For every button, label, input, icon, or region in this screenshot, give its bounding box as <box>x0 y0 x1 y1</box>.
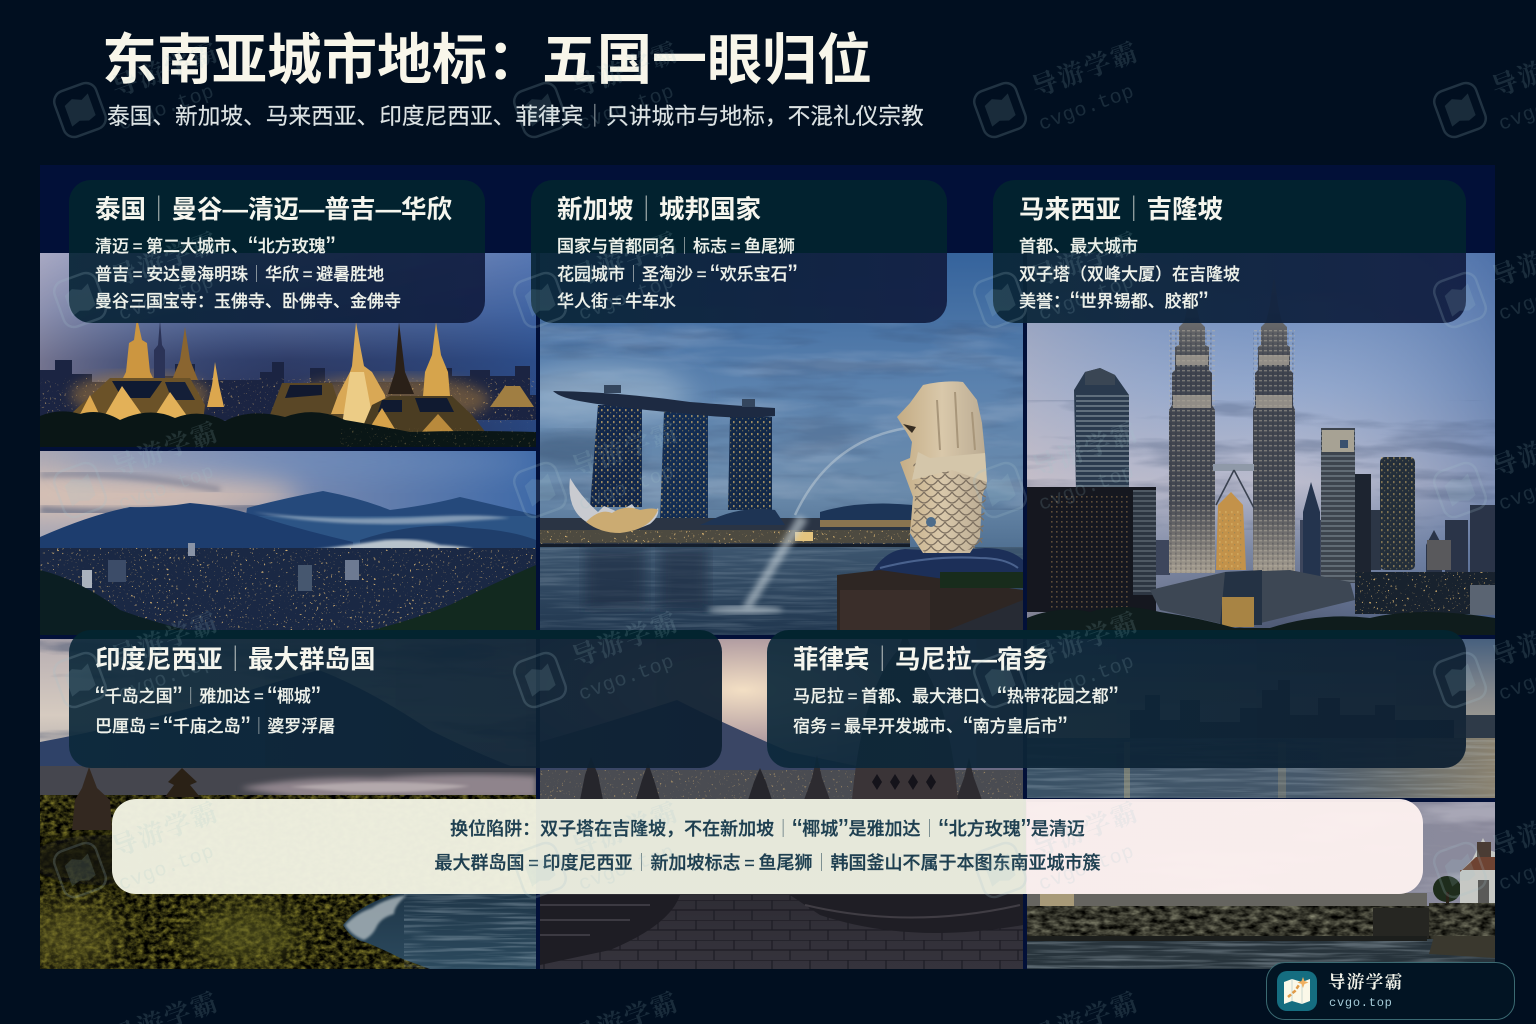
panel: Thailand <box>69 180 485 323</box>
watermark layer: 导游学霸 <box>568 797 683 863</box>
brand url: cvgo.top <box>1329 996 1393 1010</box>
brand name: 导游学霸 <box>1328 972 1404 992</box>
watermark layer: 导游学霸 <box>1028 607 1143 673</box>
watermark layer: 导游学霸 <box>1028 227 1143 293</box>
text: Jakarta: “千岛之国”｜雅加达=“椰城” <box>95 682 321 714</box>
photo: Cebu fort waterfront <box>1027 802 1495 969</box>
watermark layer: 导游学霸 <box>108 227 223 293</box>
watermark layer: cvgo.top <box>576 841 678 897</box>
watermark layer: 导游学霸 <box>108 417 223 483</box>
watermark layer: 导游学霸 <box>1028 37 1143 103</box>
text: garden city and Sentosa: 花园城市｜圣淘沙=“欢乐宝石” <box>557 260 797 292</box>
heading: Singapore: 新加坡｜城邦国家 <box>557 196 761 224</box>
watermark layer: 导游学霸 <box>1028 417 1143 483</box>
photo: Bangkok Grand Palace at dusk <box>40 253 536 447</box>
watermark layer: cvgo.top <box>116 461 218 517</box>
text: trap line one: 换位陷阱：双子塔在吉隆坡，不在新加坡｜“椰城”是雅加达｜“北方玫瑰”是清迈 <box>450 813 1085 847</box>
heading: Malaysia: 马来西亚｜吉隆坡 <box>1019 196 1223 224</box>
photo: Bali temple and coastline <box>20 639 536 969</box>
text: capital: 首都、最大城市 <box>1019 237 1138 256</box>
photo: Kuala Lumpur Petronas Towers <box>1026 253 1495 635</box>
watermark layer: 导游学霸 <box>108 797 223 863</box>
text: Chinatown: 华人街=牛车水 <box>557 292 676 311</box>
text: twin towers: 双子塔（双峰大厦）在吉隆坡 <box>1019 265 1240 284</box>
text: Manila: 马尼拉=首都、最大港口、“热带花园之都” <box>793 682 1118 714</box>
watermark layer: cvgo.top <box>1036 271 1138 327</box>
watermark layer: 导游学霸 <box>1028 797 1143 863</box>
heading: Thailand: 泰国｜曼谷—清迈—普吉—华欣 <box>95 196 452 224</box>
heading: Philippines: 菲律宾｜马尼拉—宿务 <box>793 646 1048 674</box>
callout: swap traps <box>112 799 1423 894</box>
watermark layer: 导游学霸 <box>568 417 683 483</box>
text: Bangkok temples: 曼谷三国宝寺：玉佛寺、卧佛寺、金佛寺 <box>95 292 401 311</box>
watermark layer: cvgo.top <box>576 651 678 707</box>
panel: Singapore <box>531 180 947 323</box>
text: Chiang Mai: 清迈=第二大城市、“北方玫瑰” <box>95 232 335 264</box>
panel: Malaysia <box>993 180 1466 323</box>
panel: Indonesia <box>69 630 722 768</box>
photo: Borobudur stupas at dawn <box>540 632 1023 969</box>
watermark layer: 导游学霸 <box>568 227 683 293</box>
text: Cebu: 宿务=最早开发城市、“南方皇后市” <box>793 712 1067 744</box>
text: Bali and Borobudur: 巴厘岛=“千庙之岛”｜婆罗浮屠 <box>95 712 335 744</box>
watermark layer: 导游学霸 <box>108 607 223 673</box>
watermark layer: cvgo.top <box>576 461 678 517</box>
watermark layer: 导游学霸 <box>108 37 223 103</box>
text: reputation: 美誉：“世界锡都、胶都” <box>1019 287 1208 319</box>
brand badge <box>1266 962 1515 1020</box>
watermark layer: 导游学霸 <box>568 37 683 103</box>
watermark layer: cvgo.top <box>116 651 218 707</box>
subtitle: 泰国、新加坡、马来西亚、印度尼西亚、菲律宾｜只讲城市与地标，不混礼仪宗教 <box>107 103 924 129</box>
watermark layer: cvgo.top <box>576 81 678 137</box>
watermark layer: cvgo.top <box>116 841 218 897</box>
watermark layer: cvgo.top <box>116 81 218 137</box>
heading: Indonesia: 印度尼西亚｜最大群岛国 <box>95 646 376 674</box>
watermark layer: cvgo.top <box>576 271 678 327</box>
watermark layer: cvgo.top <box>116 271 218 327</box>
watermark layer: cvgo.top <box>1036 841 1138 897</box>
text: Phuket and Hua Hin: 普吉=安达曼海明珠｜华欣=避暑胜地 <box>95 265 384 284</box>
icon: map logo <box>1277 971 1317 1011</box>
photo: Singapore Marina Bay Sands and Merlion <box>510 253 1023 635</box>
text: capital and symbol: 国家与首都同名｜标志=鱼尾狮 <box>557 237 795 256</box>
watermark layer: cvgo.top <box>1036 651 1138 707</box>
text: trap line two: 最大群岛国=印度尼西亚｜新加坡标志=鱼尾狮｜韩国釜山不属于本图东南亚城市簇 <box>434 853 1101 873</box>
panel: Philippines <box>767 630 1466 768</box>
watermark layer: cvgo.top <box>1036 461 1138 517</box>
photo: Manila Bay skyline <box>1027 639 1495 798</box>
photo: Chiang Mai valley at dusk <box>0 448 540 635</box>
photo mosaic backdrop <box>40 165 1495 969</box>
title: 东南亚城市地标：五国一眼归位 <box>102 29 872 91</box>
watermark layer: 导游学霸 <box>568 607 683 673</box>
watermark layer: cvgo.top <box>1036 81 1138 137</box>
